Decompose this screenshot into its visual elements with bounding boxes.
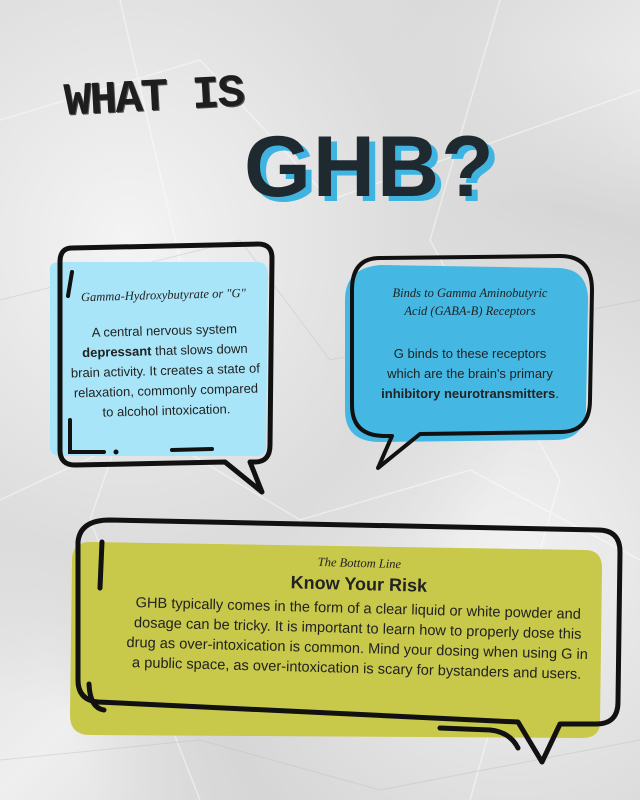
right bubble text: which are the brain's primary xyxy=(387,366,553,381)
right bubble text: inhibitory neurotransmitters. xyxy=(381,386,559,401)
right bubble text: G binds to these receptors xyxy=(394,346,546,361)
bottom bubble text xyxy=(126,555,588,683)
bottom bubble text: drug as over-intoxication is common. Mind your dosing when using G in xyxy=(126,635,588,663)
left bubble text: relaxation, commonly compared xyxy=(74,381,258,400)
left bubble text xyxy=(71,286,260,420)
title: GHB?: GHB? xyxy=(244,119,496,215)
title: WHAT IS: WHAT IS xyxy=(63,67,244,129)
right bubble text: Acid (GABA-B) Receptors xyxy=(404,304,536,318)
bottom bubble text: GHB typically comes in the form of a clear liquid or white powder and xyxy=(135,595,581,623)
bottom bubble text: dosage can be tricky. It is important to learn how to properly dose this xyxy=(134,615,582,643)
left bubble text: brain activity. It creates a state of xyxy=(71,361,260,380)
left bubble text: to alcohol intoxication. xyxy=(102,401,231,420)
bottom bubble text: Know Your Risk xyxy=(290,572,427,596)
right bubble text xyxy=(381,286,559,401)
right bubble text: Binds to Gamma Aminobutyric xyxy=(393,286,547,300)
left bubble text: A central nervous system xyxy=(92,321,237,340)
bottom bubble text: The Bottom Line xyxy=(318,555,401,571)
bottom bubble text: a public space, as over-intoxication is scary for bystanders and users. xyxy=(132,655,581,683)
left bubble text: Gamma-Hydroxybutyrate or "G" xyxy=(81,286,246,304)
left bubble text: depressant that slows down xyxy=(82,341,248,360)
